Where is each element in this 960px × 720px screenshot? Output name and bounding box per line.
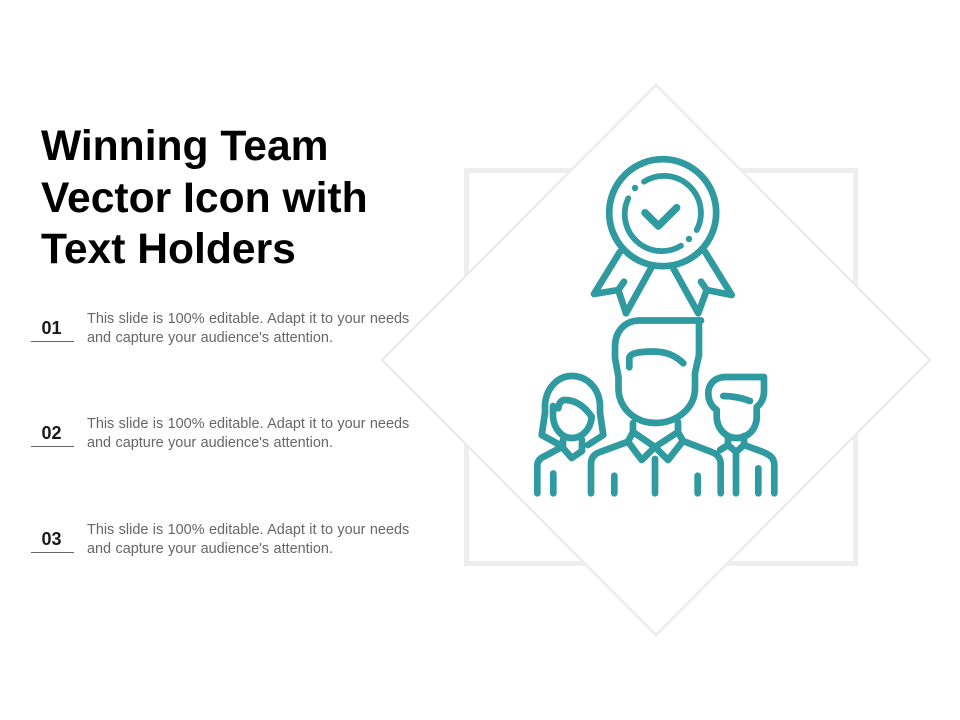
text holder 01: 01 — [41, 318, 62, 338]
square frame — [466, 170, 856, 564]
text holder 02: 02 — [41, 423, 62, 443]
title: Vector Icon with — [41, 174, 368, 222]
icon: right man — [708, 377, 774, 493]
diamond — [382, 85, 930, 635]
text holder 03: This slide is 100% editable. Adapt it to your needs — [87, 522, 409, 538]
text holder 01: and capture your audience's attention. — [87, 330, 333, 346]
title: Text Holders — [41, 225, 296, 273]
text holder 03 — [31, 522, 409, 556]
text holder 03: 03 — [41, 529, 62, 549]
text holder 02: and capture your audience's attention. — [87, 434, 333, 450]
text holder 01: This slide is 100% editable. Adapt it to your needs — [87, 311, 409, 327]
text holder 02: This slide is 100% editable. Adapt it to your needs — [87, 416, 409, 432]
title — [41, 122, 368, 273]
icon: central man — [591, 320, 721, 493]
text holder 03: and capture your audience's attention. — [87, 540, 333, 556]
title: Winning Team — [41, 122, 329, 170]
text holder 02 — [31, 416, 409, 450]
icon: woman — [537, 376, 603, 493]
text holder 01 — [31, 311, 409, 346]
icon: award badge — [594, 159, 732, 313]
